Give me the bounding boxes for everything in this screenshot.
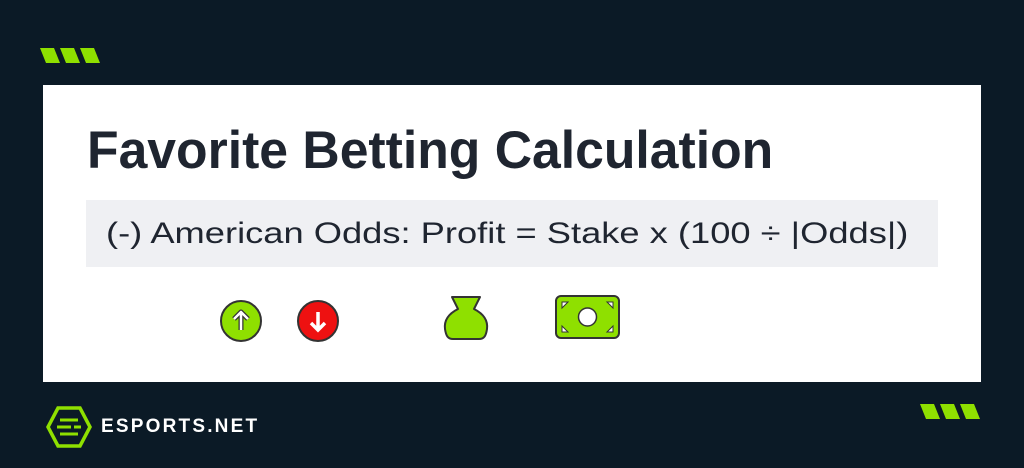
brand text: ESPORTS.NET bbox=[101, 416, 259, 437]
logo bbox=[46, 406, 259, 448]
stripes top-left bbox=[40, 48, 100, 63]
icon: logo hexagon bbox=[46, 406, 92, 448]
icon: down arrow bbox=[298, 301, 338, 341]
formula box: (-) American Odds: Profit = Stake x (100 ÷ |Odds|) bbox=[106, 217, 908, 250]
icons row bbox=[220, 295, 620, 342]
formula box bbox=[86, 200, 938, 267]
icon: money bag bbox=[445, 297, 487, 339]
icon: up arrow bbox=[221, 301, 261, 341]
panel bbox=[43, 85, 981, 382]
stripes bottom-right bbox=[920, 404, 980, 419]
icon: banknote bbox=[556, 296, 619, 338]
title: Favorite Betting Calculation bbox=[87, 121, 773, 180]
